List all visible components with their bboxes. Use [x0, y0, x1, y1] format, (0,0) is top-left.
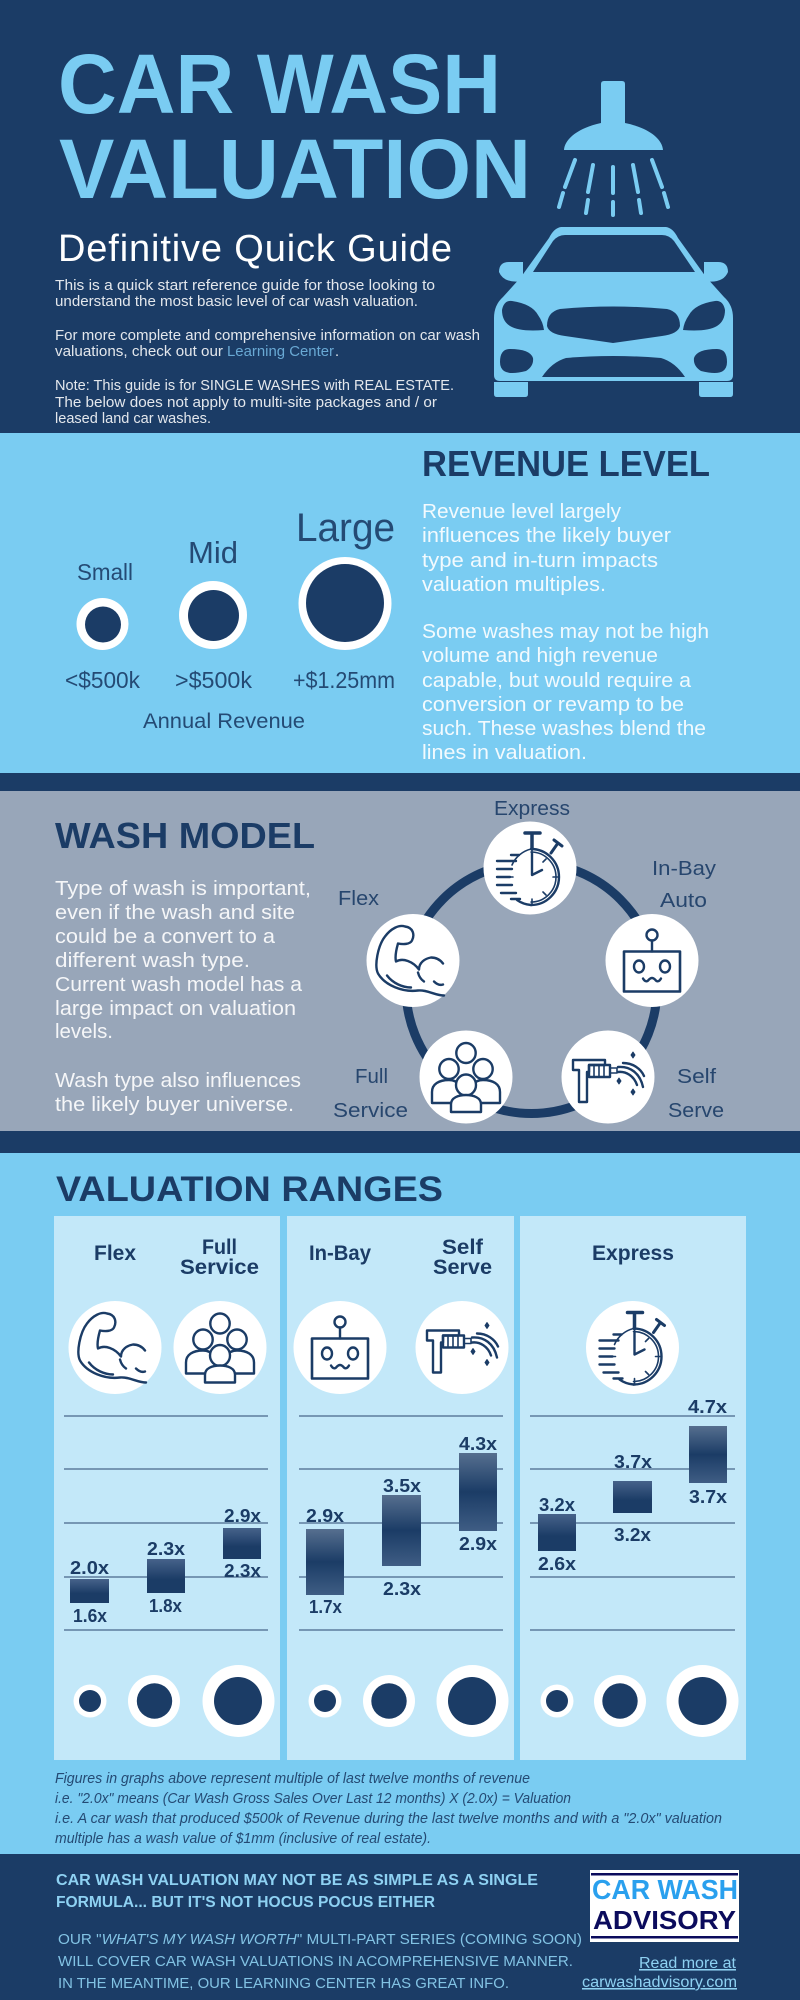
annual revenue caption: Annual Revenue: [143, 710, 305, 733]
wash model text: Wash type also influences: [55, 1070, 301, 1092]
revenue text: Revenue level largely: [422, 501, 621, 523]
footer heading: FORMULA... BUT IT'S NOT HOCUS POCUS EITHER: [56, 1894, 435, 1911]
title: [58, 37, 531, 216]
footer text: WILL COVER CAR WASH VALUATIONS IN ACOMPREHENSIVE MANNER.: [58, 1953, 573, 1970]
intro text: The below does not apply to multi-site packages and / or: [55, 395, 437, 411]
range chart: 2.9x: [224, 1506, 261, 1526]
heading: WASH MODEL: [55, 815, 315, 856]
range chart: 3.7x: [689, 1487, 727, 1507]
wash model text: Current wash model has a: [55, 974, 303, 996]
header panel: [55, 37, 733, 427]
revenue values: <$500k: [65, 667, 140, 693]
revenue values: +$1.25mm: [293, 667, 395, 693]
circle: large: [298, 557, 392, 650]
subtitle: Definitive Quick Guide: [58, 228, 452, 270]
panel: footer: [56, 1870, 739, 1992]
column titles: Serve: [433, 1256, 492, 1279]
footnote text: multiple has a wash value of $1mm (inclusive of real estate).: [55, 1831, 431, 1847]
intro text: understand the most basic level of car wash valuation.: [55, 294, 418, 310]
icon: arm flex: [366, 914, 460, 1007]
icon: robot: [294, 1301, 386, 1394]
column titles: Full: [202, 1236, 237, 1259]
footnote text: Figures in graphs above represent multiple of last twelve months of revenue: [55, 1771, 530, 1787]
range chart: 2.3x: [147, 1539, 185, 1559]
logo: ADVISORY: [593, 1905, 736, 1935]
footnote text: i.e. "2.0x" means (Car Wash Gross Sales Over Last 12 months) X (2.0x) = Valuation: [55, 1791, 571, 1807]
range chart: 1.6x: [73, 1606, 107, 1626]
intro text: Note: This guide is for SINGLE WASHES with REAL ESTATE.: [55, 378, 454, 394]
heading: VALUATION RANGES: [56, 1170, 443, 1209]
revenue text: influences the likely buyer: [422, 525, 671, 547]
title: VALUATION: [59, 122, 531, 216]
title: CAR WASH: [58, 37, 501, 131]
revenue text: conversion or revamp to be: [422, 694, 684, 716]
revenue text: volume and high revenue: [422, 645, 658, 667]
read more link: carwashadvisory.com: [582, 1974, 737, 1991]
intro text: [55, 278, 480, 427]
footer text: [58, 1931, 582, 1992]
revenue values: >$500k: [175, 667, 252, 693]
wash model text: levels.: [55, 1021, 113, 1043]
range chart: 3.5x: [383, 1476, 421, 1496]
icon: car: [494, 227, 733, 397]
footer heading: CAR WASH VALUATION MAY NOT BE AS SIMPLE AS A SINGLE: [56, 1872, 538, 1889]
intro text: For more complete and comprehensive information on car wash: [55, 328, 480, 344]
ring labels: Full: [355, 1066, 388, 1088]
revenue text: [422, 501, 709, 764]
column titles: Service: [180, 1256, 259, 1279]
panel: in-bay and self serve: [287, 1216, 514, 1760]
range chart: 2.9x: [459, 1534, 497, 1554]
range chart: 1.7x: [309, 1597, 342, 1617]
panel: valuation ranges: [54, 1170, 746, 1847]
revenue text: capable, but would require a: [422, 670, 692, 692]
logo: [590, 1870, 739, 1942]
range chart: 3.7x: [614, 1452, 652, 1472]
revenue text: such. These washes blend the: [422, 718, 706, 740]
column titles: In-Bay: [309, 1242, 371, 1265]
footer heading: [56, 1872, 538, 1911]
ring labels: Service: [333, 1100, 408, 1122]
revenue size circles: [308, 1665, 508, 1737]
wash model text: even if the wash and site: [55, 902, 295, 924]
wash model text: could be a convert to a: [55, 926, 276, 948]
icon: stopwatch: [586, 1301, 679, 1394]
ring labels: Express: [494, 798, 570, 820]
range chart: 4.3x: [459, 1434, 497, 1454]
revenue text: valuation multiples.: [422, 574, 606, 596]
size label: mid: Mid: [188, 535, 238, 570]
logo: CAR WASH: [592, 1874, 738, 1905]
panel: flex and full service: [54, 1216, 280, 1760]
panel: revenue level: [65, 443, 710, 764]
revenue text: lines in valuation.: [422, 742, 587, 764]
range chart: [299, 1416, 503, 1630]
revenue values: [65, 667, 395, 693]
revenue size circles: [540, 1665, 738, 1737]
range chart: 2.6x: [538, 1554, 576, 1574]
icon: arm: [68, 1301, 162, 1394]
footer text: OUR "WHAT'S MY WASH WORTH" MULTI-PART SERIES (COMING SOON): [58, 1931, 582, 1948]
ring labels: Flex: [338, 888, 379, 910]
wash model text: [55, 878, 311, 1116]
range chart: 3.2x: [614, 1525, 651, 1545]
revenue text: Some washes may not be high: [422, 621, 709, 643]
icon: shower head: [559, 81, 668, 215]
ring labels: [333, 798, 724, 1122]
intro text: .: [335, 344, 339, 360]
column titles: Self: [442, 1236, 484, 1259]
icon: people: [174, 1301, 266, 1394]
range chart: 2.3x: [224, 1561, 261, 1581]
range chart: 4.7x: [688, 1397, 727, 1417]
range chart: [530, 1397, 735, 1630]
icon: stopwatch express: [484, 822, 576, 914]
wash model text: different wash type.: [55, 950, 250, 972]
range chart: [64, 1416, 268, 1630]
icon: hose: [416, 1301, 508, 1394]
panel: express: [520, 1216, 746, 1760]
column titles: [94, 1236, 259, 1279]
column titles: Flex: [94, 1242, 136, 1265]
icon: robot in-bay: [606, 914, 698, 1007]
range chart: 3.2x: [539, 1495, 575, 1515]
revenue size circles: [74, 1665, 274, 1737]
intro text: valuations, check out our: [55, 344, 223, 360]
range chart: 1.8x: [149, 1596, 182, 1616]
icon: hose self serve: [562, 1030, 654, 1124]
range chart: 2.3x: [383, 1579, 421, 1599]
wash model text: the likely buyer universe.: [55, 1094, 294, 1116]
revenue text: type and in-turn impacts: [422, 550, 658, 572]
size label: large: Large: [296, 506, 395, 550]
intro text: Learning Center: [227, 344, 334, 360]
ring diagram: [366, 822, 698, 1124]
intro text: This is a quick start reference guide for those looking to: [55, 278, 435, 294]
panel: wash model: [55, 798, 724, 1124]
read more link: Read more at: [639, 1955, 737, 1972]
ring labels: Self: [677, 1066, 716, 1088]
column title: Express: [592, 1242, 674, 1265]
footnote text: i.e. A car wash that produced $500k of Revenue during the last twelve months and with a "2.0x" valuation: [55, 1811, 722, 1827]
column titles: [309, 1236, 492, 1279]
size label: small: Small: [77, 559, 133, 585]
read more link: [582, 1955, 737, 1991]
footer text: IN THE MEANTIME, OUR LEARNING CENTER HAS GREAT INFO.: [58, 1975, 509, 1992]
range chart: 2.0x: [70, 1558, 109, 1578]
wash model text: large impact on valuation: [55, 998, 296, 1020]
range chart: 2.9x: [306, 1506, 344, 1526]
footnote text: [55, 1771, 722, 1847]
wash model text: Type of wash is important,: [55, 878, 311, 900]
circle: small: [76, 598, 128, 650]
ring labels: In-Bay: [652, 858, 716, 880]
ring labels: Auto: [660, 890, 707, 912]
circle: mid: [179, 581, 247, 649]
icon: people full service: [420, 1030, 512, 1124]
intro text: leased land car washes.: [55, 411, 211, 427]
ring labels: Serve: [668, 1100, 724, 1122]
heading: REVENUE LEVEL: [422, 443, 710, 484]
